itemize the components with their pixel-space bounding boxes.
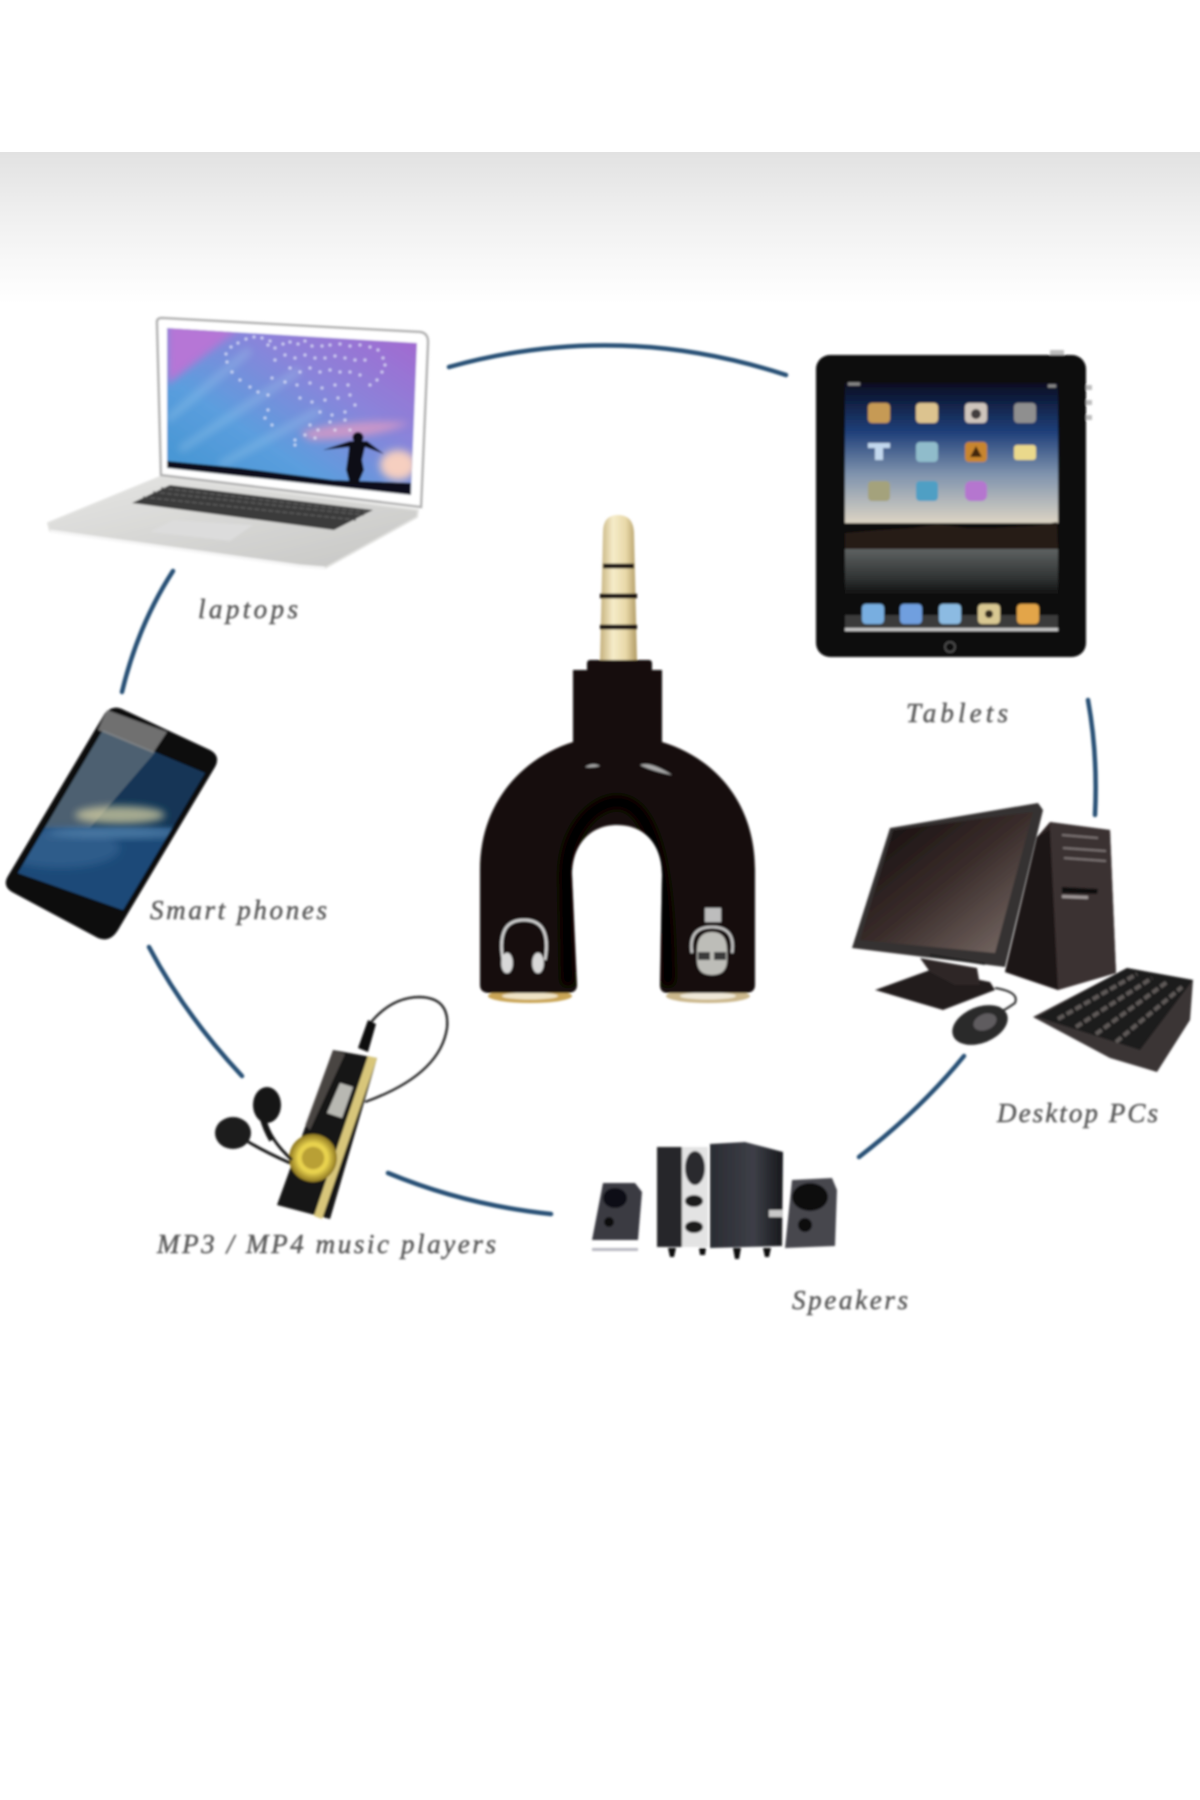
label: Tablets: Tablets	[906, 698, 1008, 728]
label: Desktop PCs: Desktop PCs	[996, 1098, 1158, 1128]
icon: smart phone	[0, 708, 220, 939]
icon: microphone symbol	[691, 908, 733, 975]
icon: speakers	[592, 1142, 837, 1259]
icon: desktop PC	[852, 803, 1193, 1072]
icon: audio splitter adapter	[480, 515, 755, 1003]
arrow: arc phone to laptop	[122, 571, 173, 692]
diagram	[0, 318, 1193, 1315]
tablet app icons	[862, 403, 1039, 624]
top grey gradient band	[0, 152, 1200, 304]
label: MP3 / MP4 music players: MP3 / MP4 music players	[156, 1229, 496, 1259]
icon: laptop	[48, 318, 428, 568]
icon: MP3 player with earphones	[215, 997, 447, 1219]
icon: tablet	[816, 350, 1092, 657]
label: laptops: laptops	[198, 594, 298, 624]
arrow: arc MP3 player to phone	[149, 947, 242, 1076]
label: Smart phones: Smart phones	[150, 895, 327, 925]
icon: headphones symbol	[502, 920, 546, 972]
arrow: arc desktop to speakers	[859, 1056, 964, 1157]
arrow: arc speakers to MP3 player	[388, 1173, 551, 1214]
arrow: arc laptop to tablet	[449, 345, 786, 375]
arrow: arc tablet to desktop	[1088, 700, 1096, 815]
label: Speakers: Speakers	[792, 1285, 908, 1315]
